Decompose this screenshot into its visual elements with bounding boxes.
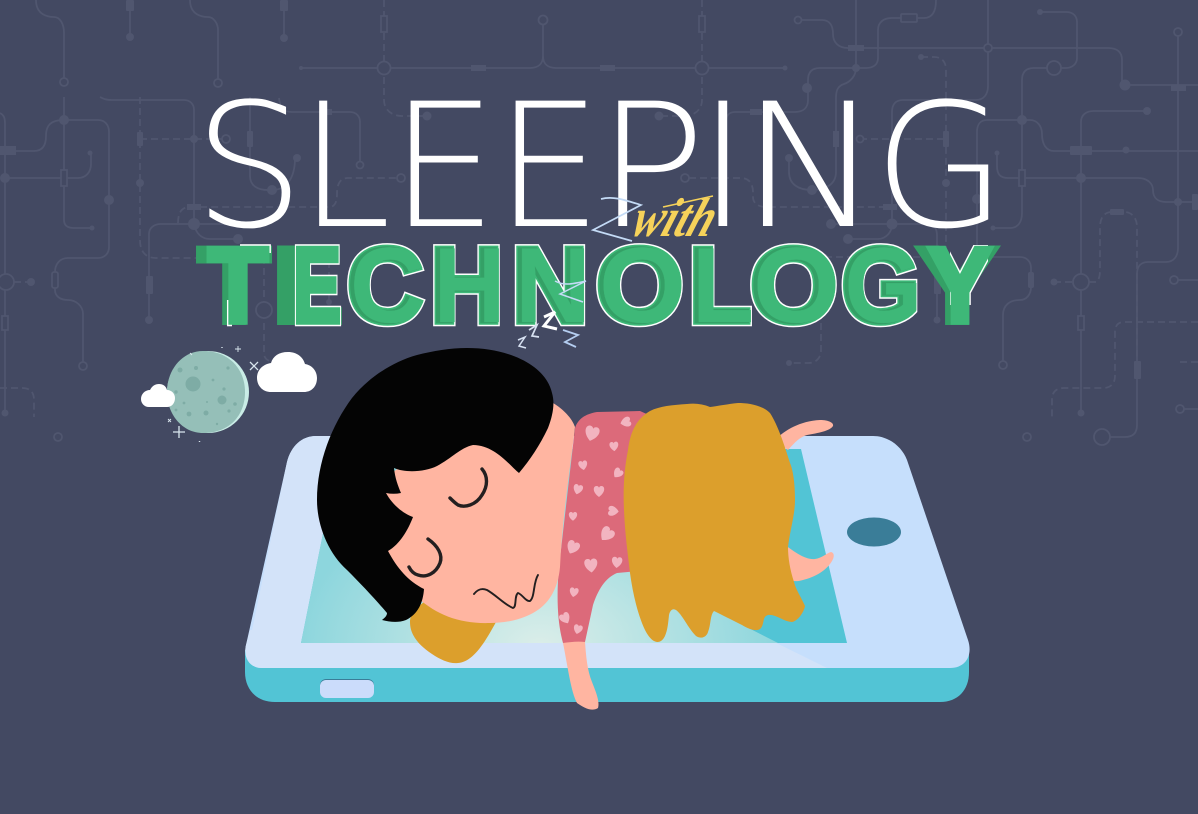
title: TECHNOLOGY: C	[347, 225, 423, 345]
title: TECHNOLOGY: C	[350, 225, 426, 345]
title: TECHNOLOGY: G	[842, 225, 920, 345]
title: TECHNOLOGY: G	[844, 225, 922, 345]
title: TECHNOLOGY: O	[750, 225, 837, 345]
title: TECHNOLOGY: L	[689, 225, 751, 345]
title: TECHNOLOGY: H	[430, 225, 502, 345]
title: TECHNOLOGY: Y	[928, 225, 992, 345]
title: TECHNOLOGY: C	[347, 225, 423, 345]
title: SLEEPING: S	[194, 66, 304, 267]
title: SLEEPING: L	[299, 66, 391, 267]
mouth	[474, 575, 538, 608]
title: SLEEPING: E	[495, 66, 602, 267]
title: SLEEPING: P	[596, 66, 706, 267]
title: TECHNOLOGY: O	[599, 225, 686, 345]
home button	[320, 679, 374, 698]
title: TECHNOLOGY: N	[512, 225, 588, 345]
black hair	[317, 348, 553, 622]
title: TECHNOLOGY: G	[842, 225, 920, 345]
title: TECHNOLOGY: H	[434, 225, 506, 345]
phone side	[245, 650, 969, 702]
pyjama top	[558, 411, 660, 644]
back hand	[785, 545, 834, 581]
title: TECHNOLOGY: C	[347, 225, 423, 345]
title: TECHNOLOGY: O	[596, 225, 683, 345]
lighter bezel strip	[245, 630, 827, 668]
phone	[245, 436, 970, 702]
title: TECHNOLOGY: N	[512, 225, 588, 345]
title: SLEEPING: G	[874, 66, 1006, 267]
title: SLEEPING: I	[698, 66, 748, 267]
title: TECHNOLOGY: H	[430, 225, 502, 345]
title: TECHNOLOGY: E	[293, 225, 341, 345]
title: TECHNOLOGY: E	[293, 225, 341, 345]
title: TECHNOLOGY: O	[750, 225, 837, 345]
title: TECHNOLOGY: G	[842, 225, 920, 345]
icon: sleep Z scribbles	[518, 198, 641, 348]
title: SLEEPING	[194, 66, 1006, 267]
title: TECHNOLOGY: O	[596, 225, 683, 345]
closed eyes	[409, 469, 486, 576]
icon: sparkles	[168, 346, 258, 442]
icon: small cloud	[141, 384, 175, 407]
title: with (script accent): with	[624, 188, 726, 249]
title: TECHNOLOGY: T	[208, 225, 268, 345]
arm hanging	[563, 642, 599, 710]
title: TECHNOLOGY: E	[273, 225, 343, 345]
title: TECHNOLOGY: T	[208, 225, 268, 345]
camera	[847, 518, 901, 546]
title: TECHNOLOGY: L	[692, 225, 754, 345]
icon: large cloud	[257, 352, 317, 392]
title: TECHNOLOGY: L	[689, 225, 751, 345]
long blond hair	[624, 403, 805, 642]
title: TECHNOLOGY: O	[596, 225, 683, 345]
title: TECHNOLOGY: L	[689, 225, 751, 345]
face	[384, 400, 575, 623]
character: sleeping girl	[317, 348, 834, 710]
title: TECHNOLOGY: O	[753, 225, 840, 345]
title: SLEEPING: N	[740, 66, 882, 267]
title: SLEEPING: E	[390, 66, 497, 267]
back arm top	[775, 420, 833, 450]
title: TECHNOLOGY: N	[515, 225, 591, 345]
icon: moon	[167, 351, 249, 433]
lower hair	[410, 602, 496, 663]
title: TECHNOLOGY: Y	[928, 225, 992, 345]
title: TECHNOLOGY: Y	[917, 225, 997, 345]
title: TECHNOLOGY: H	[430, 225, 502, 345]
phone top face	[245, 436, 970, 668]
title: TECHNOLOGY: N	[512, 225, 588, 345]
title: TECHNOLOGY: O	[750, 225, 837, 345]
title: TECHNOLOGY: T	[198, 225, 270, 345]
title: TECHNOLOGY	[196, 243, 1001, 328]
